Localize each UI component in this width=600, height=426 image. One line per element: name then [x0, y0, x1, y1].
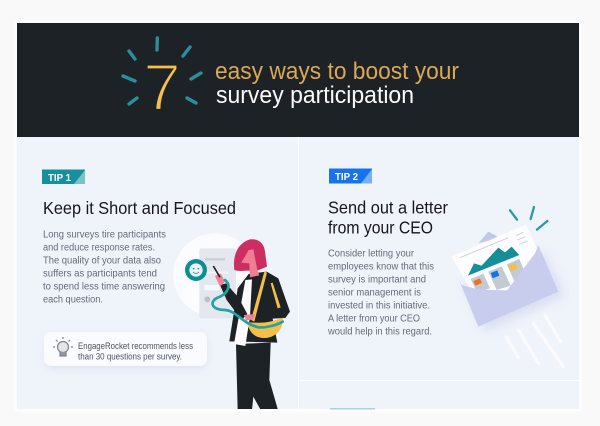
tip 1 body text: and reduce response rates. — [43, 242, 155, 254]
tip 2 body text: invested in this initiative. — [328, 300, 430, 312]
neck and face — [241, 249, 259, 277]
tip 1 badge: TIP 1 — [48, 172, 71, 184]
vertical divider — [298, 137, 299, 409]
tip 2 panel — [327, 168, 565, 367]
tip 1 title: Keep it Short and Focused — [43, 198, 236, 218]
forearm — [220, 283, 247, 320]
tip 1 body text: The quality of your data also — [43, 256, 161, 266]
survey form on phone screen — [199, 248, 236, 318]
tip 3 badge peek — [330, 408, 375, 410]
tip 1 body text: to spend less time answering — [43, 282, 165, 292]
mountain chart — [468, 247, 519, 276]
tip 2 body text: employees know that this — [328, 262, 434, 272]
tip 2 body text: A letter from your CEO — [328, 314, 420, 324]
recommendation callout — [44, 332, 207, 368]
tip 2 body text: survey is important and — [328, 274, 426, 286]
bag — [247, 272, 283, 338]
tip 1 panel — [42, 170, 290, 410]
white shirt — [234, 279, 252, 346]
number seven: 7 — [143, 50, 181, 124]
header banner — [17, 23, 579, 137]
recommendation callout: EngageRocket recommends less — [78, 341, 193, 351]
hair — [234, 239, 267, 271]
envelope back flap — [478, 232, 499, 243]
teal ribbon — [213, 280, 283, 327]
survey backdrop circle — [174, 234, 250, 314]
woman with phone illustration — [173, 233, 290, 410]
tip 2 title — [328, 198, 448, 238]
teal sparks — [510, 207, 547, 230]
envelope front pocket — [458, 245, 558, 327]
jacket — [229, 272, 290, 343]
envelope and letter illustration — [452, 207, 565, 367]
tip 2 body text: would help in this regard. — [327, 326, 432, 338]
icon: light bulb — [53, 337, 73, 356]
tip 2 badge — [329, 168, 372, 184]
tip 2 badge: TIP 2 — [335, 171, 358, 183]
tip 1 body text — [43, 230, 166, 306]
recommendation callout: than 30 questions per survey. — [78, 352, 182, 362]
heading line two: survey participation — [216, 82, 414, 109]
tip 2 body text: Consider letting your — [328, 248, 415, 260]
tip 1 body text: suffers as participants tend — [43, 268, 157, 280]
hand and phone — [213, 266, 255, 321]
tip 2 title: from your CEO — [328, 218, 433, 238]
tip 1 badge — [42, 170, 85, 184]
tips panel background — [17, 137, 579, 409]
tip 2 body text — [327, 248, 434, 338]
letter sheet — [452, 224, 540, 292]
smiley badge — [185, 259, 207, 281]
tip 1 body text: Long surveys tire participants — [43, 230, 166, 240]
report cards — [471, 259, 525, 292]
tip 2 body text: senior management is — [328, 288, 421, 298]
white motion streaks — [506, 315, 563, 367]
heading line one: easy ways to boost your — [215, 58, 459, 85]
tip 2 title: Send out a letter — [328, 198, 448, 218]
horizontal divider — [300, 380, 579, 381]
teal rays around seven — [123, 38, 201, 104]
envelope shadow — [465, 252, 565, 332]
tip 1 body text: each question. — [43, 294, 103, 306]
trousers — [236, 343, 278, 410]
